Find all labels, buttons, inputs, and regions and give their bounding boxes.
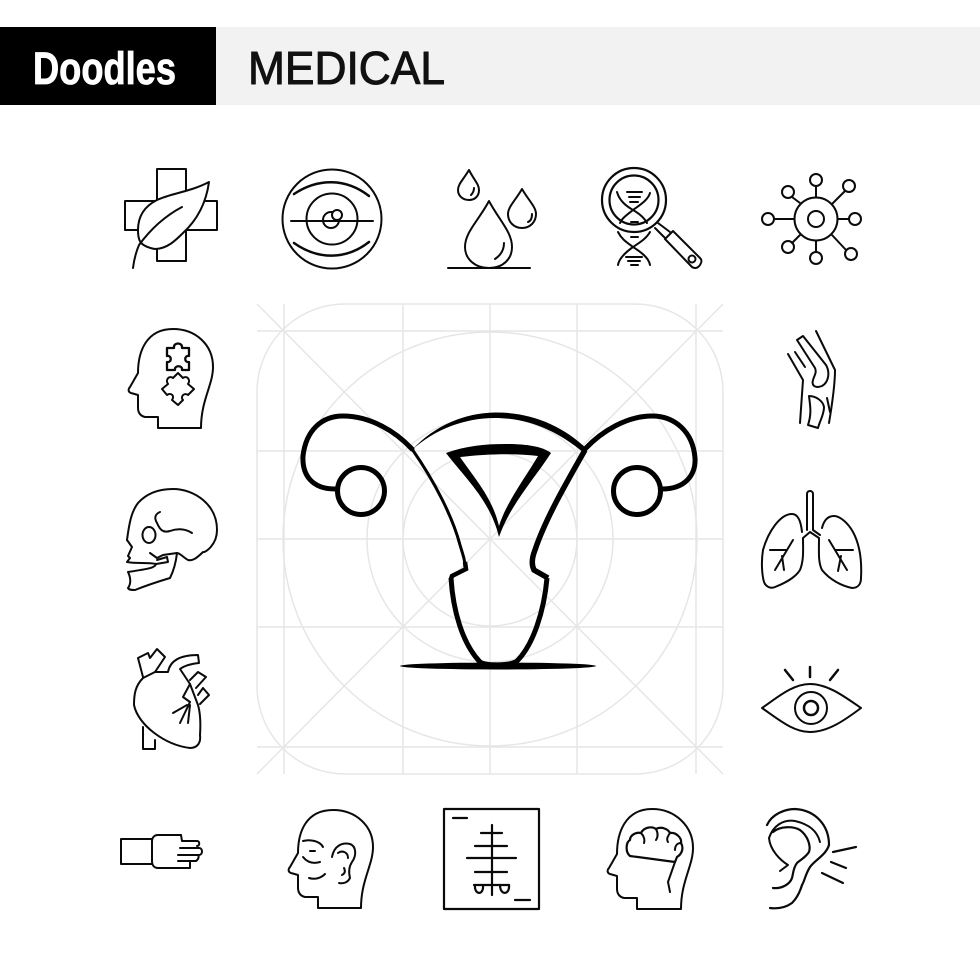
icon: head with puzzle pieces [129, 329, 213, 428]
heading: Doodles: Doodles [33, 43, 176, 94]
icon: eye with rays [762, 667, 861, 732]
icon: ear with sound lines [767, 809, 856, 908]
icon: lungs [762, 491, 861, 588]
heading: Medical: MEDICAL [248, 42, 445, 94]
icon: eye in circle [282, 170, 382, 268]
icon: anatomical heart [134, 649, 209, 749]
icon: head with brain [608, 809, 693, 909]
icon: water drops [448, 170, 536, 268]
header bar [0, 27, 980, 105]
icon: hand [121, 835, 202, 868]
icon: knee joint [788, 331, 835, 428]
icon: magnifier over DNA [602, 168, 702, 268]
icon: virus cell [762, 174, 861, 264]
icon: leaf cross [125, 169, 217, 268]
icon: head with face [289, 810, 373, 908]
icon construction grid [257, 304, 723, 774]
central icon: uterus [303, 412, 695, 670]
icon: skull [127, 489, 217, 590]
icon: x-ray film [444, 809, 539, 909]
